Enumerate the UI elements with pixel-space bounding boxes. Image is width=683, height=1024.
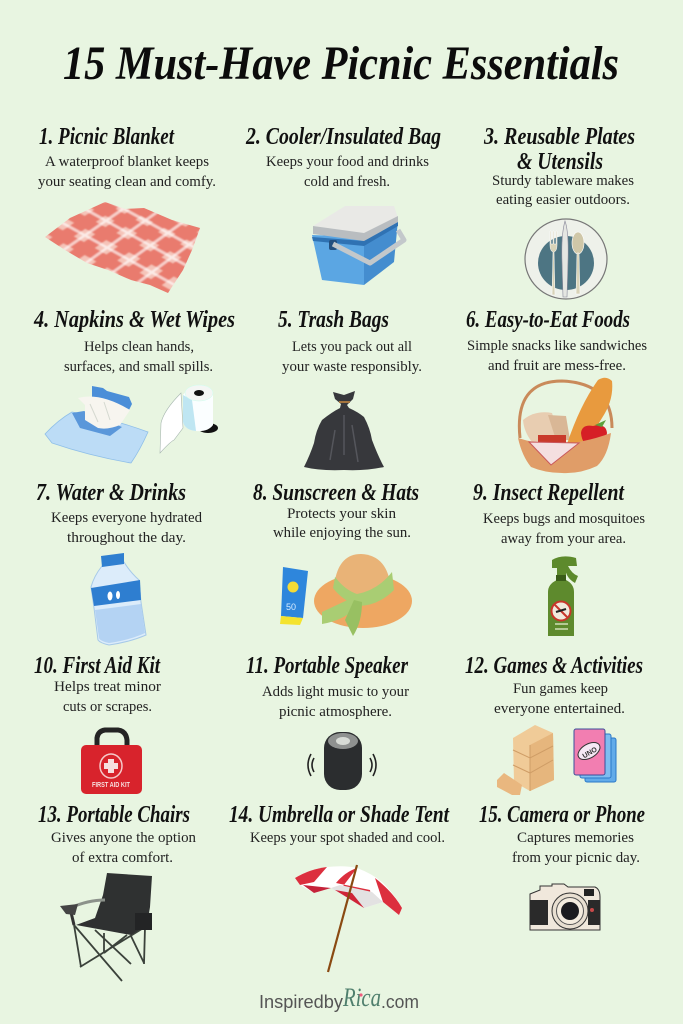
panel: water: [36, 480, 202, 645]
heading: 2. Cooler/Insulated Bag: [245, 124, 441, 150]
icon: wet wipes pack: [45, 386, 148, 463]
description: your waste responsibly.: [282, 359, 422, 375]
panel: foods: [466, 307, 647, 473]
heading: 6. Easy-to-Eat Foods: [466, 307, 630, 333]
panel: games: [465, 653, 643, 795]
description: [512, 830, 640, 866]
icon: paper towel roll: [160, 385, 218, 453]
panel: first aid kit: [34, 653, 161, 794]
icon: picnic basket: [518, 378, 612, 473]
panel: picnic blanket: [38, 124, 216, 298]
panel: sunscreen and hats: [253, 480, 419, 636]
footer logo: Inspiredby: [259, 992, 343, 1012]
description: everyone entertained.: [494, 701, 625, 717]
description: your seating clean and comfy.: [38, 174, 216, 190]
heading: 1. Picnic Blanket: [39, 124, 175, 150]
icon: smart speaker with sound waves: [308, 732, 376, 790]
description: cuts or scrapes.: [63, 699, 152, 715]
heading: 3. Reusable Plates: [483, 124, 635, 150]
description: [51, 830, 196, 866]
footer logo: Rica: [342, 983, 381, 1012]
panel: napkins and wipes: [33, 307, 235, 463]
description: Helps clean hands,: [84, 339, 194, 355]
heading: 4. Napkins & Wet Wipes: [33, 307, 235, 333]
heading: 13. Portable Chairs: [38, 802, 190, 828]
description: [266, 154, 429, 190]
icon: plate with cutlery: [525, 219, 607, 299]
icon: wooden block tower: [497, 725, 554, 795]
description: Adds light music to your: [262, 684, 409, 700]
icon: retro camera: [530, 884, 600, 930]
panel: portable chairs: [38, 802, 196, 981]
description: of extra comfort.: [72, 850, 173, 866]
icon: water bottle: [91, 553, 146, 645]
description: Lets you pack out all: [292, 339, 412, 355]
description: Keeps your spot shaded and cool.: [250, 830, 445, 846]
icon: straw hat with scarf: [314, 554, 412, 636]
title: 15 Must-Have Picnic Essentials: [63, 37, 619, 90]
description: [64, 339, 213, 375]
icon: spray bottle: [548, 556, 578, 636]
icon: sunscreen tube: 50: [286, 602, 296, 612]
icon: uno card deck: [574, 729, 616, 782]
description: Keeps everyone hydrated: [51, 510, 202, 526]
description: [483, 511, 645, 547]
description: [492, 173, 634, 208]
description: eating easier outdoors.: [496, 192, 630, 208]
description: cold and fresh.: [304, 174, 390, 190]
panel: umbrella: [229, 802, 450, 972]
description: while enjoying the sun.: [273, 525, 411, 541]
description: [273, 506, 411, 541]
description: picnic atmosphere.: [279, 704, 392, 720]
description: [51, 510, 202, 546]
description: [38, 154, 216, 190]
description: Keeps your food and drinks: [266, 154, 429, 170]
heading: 7. Water & Drinks: [36, 480, 186, 506]
heading: 12. Games & Activities: [465, 653, 643, 679]
description: Captures memories: [517, 830, 634, 846]
description: [494, 681, 625, 717]
description: [467, 338, 647, 374]
icon: black trash bag: [304, 391, 384, 470]
description: and fruit are mess-free.: [488, 358, 626, 374]
panel: plates and utensils: [483, 124, 635, 299]
icon: uno card deck: UNO: [582, 746, 599, 760]
description: Gives anyone the option: [51, 830, 196, 846]
heading: 10. First Aid Kit: [34, 653, 161, 679]
description: surfaces, and small spills.: [64, 359, 213, 375]
heading: 11. Portable Speaker: [246, 653, 409, 679]
icon: cooler box: [312, 206, 404, 285]
description: [262, 684, 409, 720]
description: [282, 339, 422, 375]
icon: folding camp chair: [60, 873, 152, 981]
panel: cooler: [245, 124, 441, 285]
panel: camera: [479, 802, 645, 930]
heading: 14. Umbrella or Shade Tent: [229, 802, 450, 828]
heading: 5. Trash Bags: [278, 307, 389, 333]
heading: 9. Insect Repellent: [473, 480, 625, 506]
description: A waterproof blanket keeps: [45, 154, 209, 170]
panel: portable speaker: [246, 653, 409, 790]
description: Protects your skin: [287, 506, 397, 522]
icon: red first aid bag: FIRST AID KIT: [92, 782, 131, 789]
icon: red and white beach umbrella: [295, 865, 402, 972]
description: Simple snacks like sandwiches: [467, 338, 647, 354]
panel: insect repellent: [473, 480, 645, 636]
icon: sunscreen tube: [280, 567, 308, 625]
icon: checked blanket: [45, 202, 200, 293]
description: Helps treat minor: [54, 679, 161, 695]
description: Sturdy tableware makes: [492, 173, 634, 189]
description: [54, 679, 161, 715]
footer logo: .com: [381, 992, 419, 1012]
heading: & Utensils: [517, 149, 603, 175]
footer logo: [259, 983, 419, 1012]
description: Keeps bugs and mosquitoes: [483, 511, 645, 527]
panel: trash bags: [278, 307, 422, 470]
description: away from your area.: [501, 531, 626, 547]
heading: 8. Sunscreen & Hats: [253, 480, 419, 506]
description: from your picnic day.: [512, 850, 640, 866]
icon: red first aid bag: [81, 730, 142, 794]
description: throughout the day.: [67, 530, 186, 546]
heading: [483, 124, 635, 175]
description: Fun games keep: [513, 681, 608, 697]
